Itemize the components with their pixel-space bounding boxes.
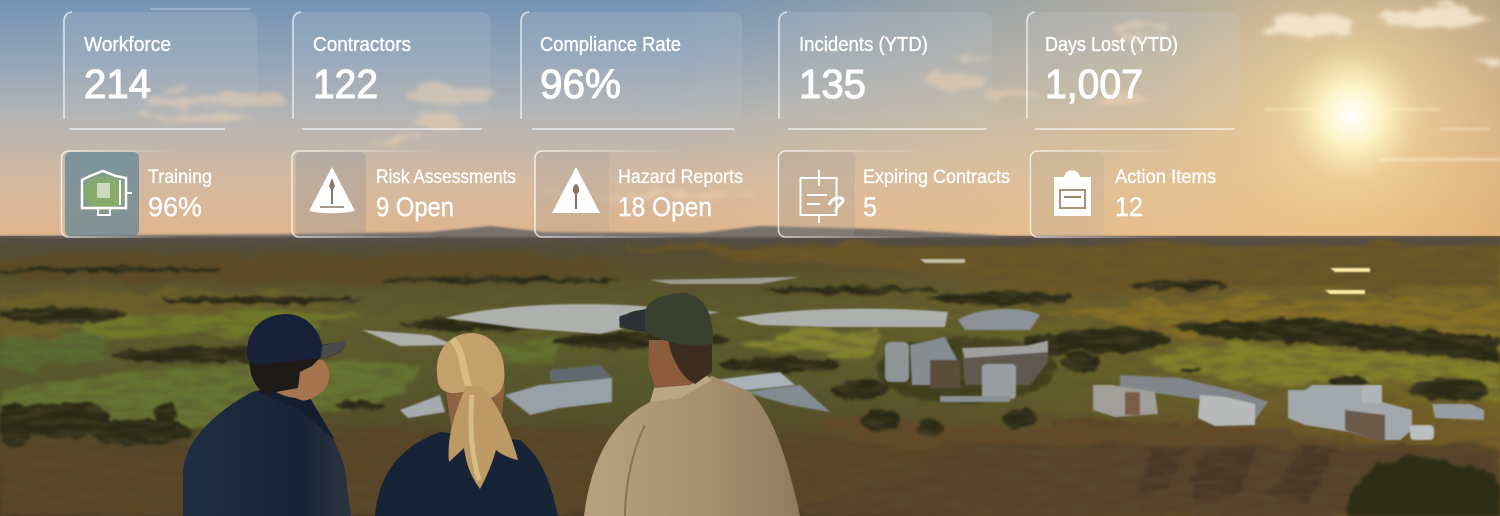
status card: Risk Assessments: Risk Assessments — [376, 166, 516, 188]
distant hills — [0, 226, 1500, 246]
background: sunset sky — [0, 0, 1500, 305]
status card: Expiring Contracts — [778, 151, 1010, 237]
icon: warning triangle — [296, 152, 366, 236]
status card: Expiring Contracts: 5 — [863, 192, 877, 222]
woman with ponytail — [375, 333, 558, 516]
lakes — [362, 259, 1370, 346]
KPI card: Compliance Rate — [520, 12, 742, 129]
status card: Hazard Reports: 18 Open — [618, 192, 712, 222]
central sheds — [400, 365, 830, 418]
status card: Action Items: Action Items — [1115, 166, 1216, 188]
KPI card: Contractors — [292, 12, 491, 129]
status card: Training — [62, 151, 212, 237]
man in khaki shirt — [584, 293, 800, 516]
KPI card: Days Lost (YTD): 1,007 — [1045, 61, 1143, 107]
background: farmland landscape — [0, 226, 1500, 516]
KPI card: Incidents (YTD): 135 — [799, 61, 866, 107]
icon: action clipboard — [1031, 152, 1104, 236]
KPI card: Compliance Rate: Compliance Rate — [540, 34, 681, 56]
KPI card: Days Lost (YTD): Days Lost (YTD) — [1045, 34, 1178, 56]
field and terrain texture — [0, 240, 1500, 516]
status card: Hazard Reports: Hazard Reports — [618, 166, 743, 188]
KPI card: Workforce — [62, 9, 257, 129]
status card: Action Items — [1030, 151, 1216, 237]
status card: Risk Assessments: 9 Open — [376, 192, 454, 222]
status card: Action Items: 12 — [1115, 192, 1143, 222]
man in navy cap — [183, 314, 351, 516]
KPI card: Incidents (YTD): Incidents (YTD) — [799, 34, 928, 56]
processing plant — [885, 337, 1484, 440]
status card: Hazard Reports — [535, 151, 743, 237]
KPI card: Contractors: Contractors — [313, 34, 411, 56]
foreground tree — [1346, 457, 1500, 516]
KPI card: Compliance Rate: 96% — [540, 61, 621, 107]
KPI card: Workforce: Workforce — [84, 34, 171, 56]
KPI card: Incidents (YTD) — [778, 12, 992, 129]
icon: training board — [65, 152, 139, 236]
icon: contract document — [779, 152, 855, 236]
status card: Risk Assessments — [292, 151, 516, 237]
KPI card: Days Lost (YTD) — [1026, 12, 1240, 129]
icon: hazard triangle — [536, 152, 609, 236]
KPI card: Contractors: 122 — [313, 61, 378, 107]
status card: Training: 96% — [148, 192, 202, 222]
status card: Training: Training — [148, 166, 212, 188]
status card: Expiring Contracts: Expiring Contracts — [863, 166, 1010, 188]
KPI card: Workforce: 214 — [84, 61, 151, 107]
